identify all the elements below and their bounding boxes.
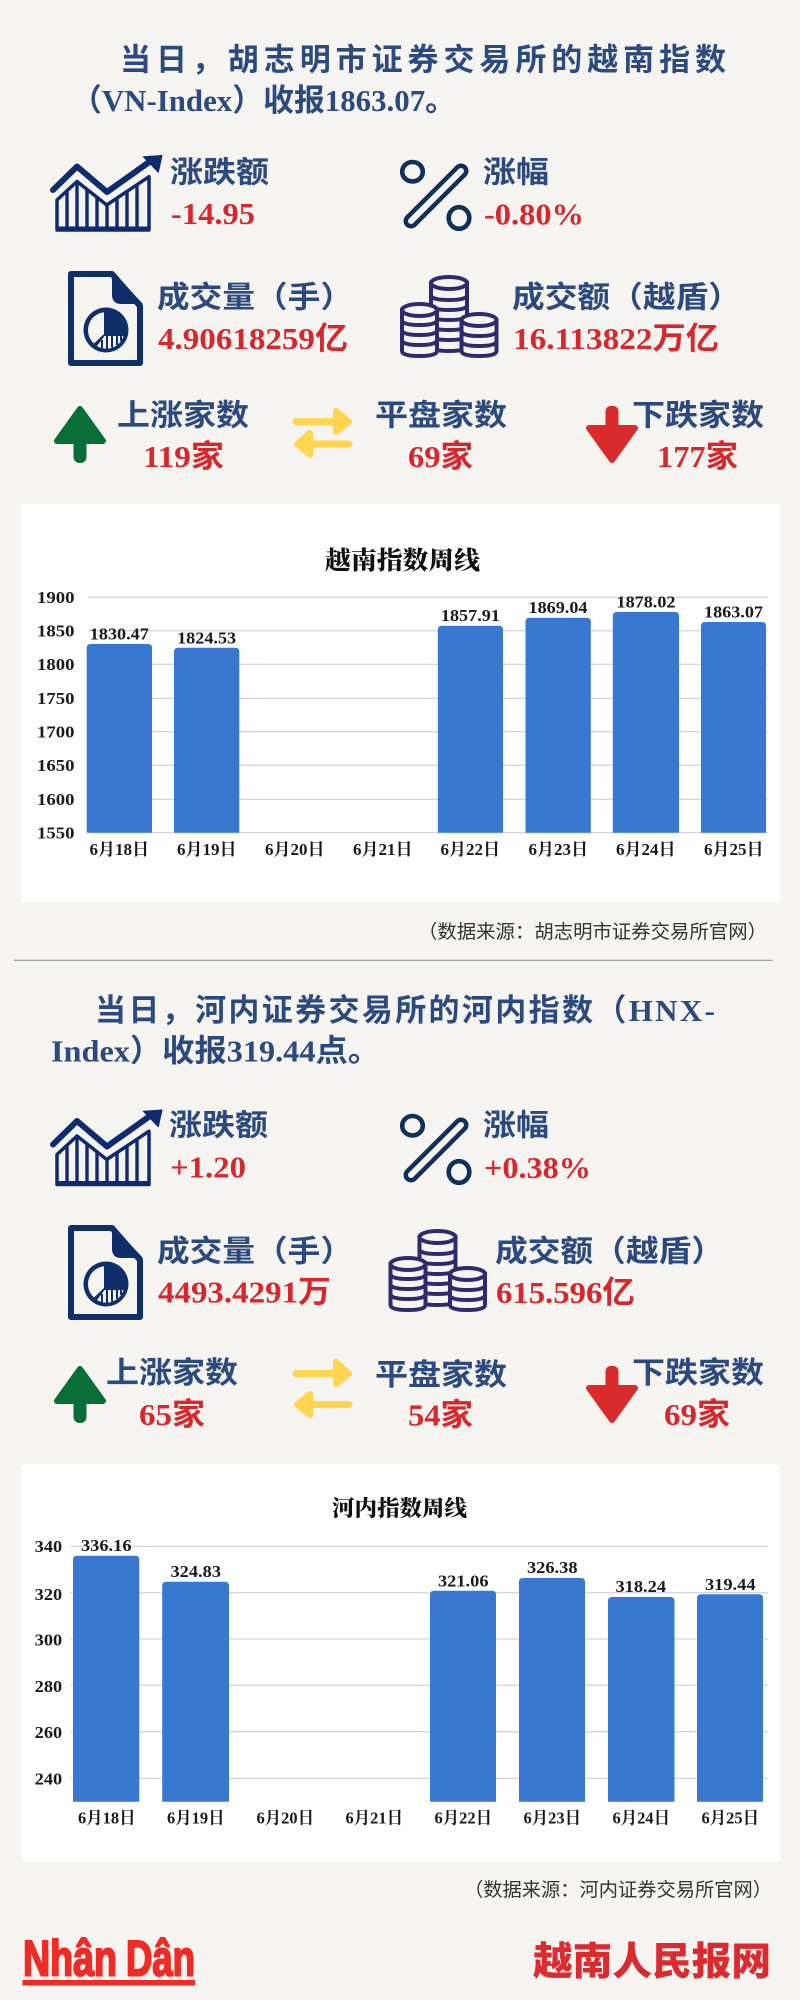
x axis labels: 6月25日 <box>702 1808 759 1828</box>
icon: yellow exchange arrows <box>296 411 349 455</box>
stat: decliners: 177家 <box>657 439 738 474</box>
x axis labels: 6月23日 <box>528 840 588 859</box>
icon: green up arrow <box>57 409 103 463</box>
y axis labels: 1850 <box>37 622 74 640</box>
y axis labels: 280 <box>35 1677 62 1696</box>
stat: change amount: 涨跌额 <box>170 156 269 190</box>
bar value labels: 1857.91 <box>441 606 500 625</box>
stat: trading value <box>495 1236 724 1310</box>
stat: decliners: 69家 <box>664 1397 730 1432</box>
x axis labels: 6月23日 <box>524 1808 581 1828</box>
title: HNX-Index summary <box>51 993 715 1068</box>
x axis labels: 6月24日 <box>616 840 676 859</box>
y axis labels: 260 <box>35 1723 62 1742</box>
brand name: 越南人民报网 <box>533 1941 771 1984</box>
logo: Nhan Dan: Dân <box>126 1930 195 1986</box>
stat: trading volume: 4493.4291万 <box>158 1274 331 1310</box>
bar value labels: 1878.02 <box>616 592 676 612</box>
x axis labels: 6月24日 <box>612 1808 670 1828</box>
stat: unchanged: 69家 <box>408 439 473 474</box>
icon: rising chart <box>53 1110 162 1186</box>
icon: document with pie chart <box>71 271 143 363</box>
y axis labels <box>37 588 74 842</box>
bar value labels: 324.83 <box>170 1562 221 1581</box>
x axis labels: 6月25日 <box>704 840 764 859</box>
x axis labels: 6月21日 <box>346 1808 403 1828</box>
x axis labels: 6月20日 <box>256 1808 314 1828</box>
title: VN-Index summary: （VN-Index）收报1863.07。 <box>71 83 456 118</box>
icon: percent <box>402 1116 469 1183</box>
title: HNX-Index summary: 当日，河内证券交易所的河内指数（HNX- <box>95 993 715 1028</box>
stat: unchanged: 平盘家数 <box>375 1359 507 1392</box>
stat: change percent: -0.80% <box>484 196 584 232</box>
icon: coins <box>390 1231 485 1310</box>
y axis labels: 1900 <box>37 588 74 607</box>
stat: change percent <box>483 1110 591 1185</box>
y axis labels: 340 <box>35 1537 62 1556</box>
bar value labels: 1863.07 <box>704 602 764 622</box>
x axis labels: 6月22日 <box>434 1808 492 1828</box>
stat: trading value: 16.113822万亿 <box>513 321 719 356</box>
y axis labels: 1800 <box>37 655 74 674</box>
stat: decliners: 下跌家数 <box>632 400 764 432</box>
stat: unchanged <box>375 1359 507 1432</box>
source note: HOSE: （数据来源：胡志明市证券交易所官网） <box>418 921 767 943</box>
panel: HNX-Index weekly bar chart <box>21 1464 780 1862</box>
icon: red down arrow <box>589 406 635 460</box>
section: HNX-Index <box>21 993 780 1901</box>
icon: red down arrow <box>589 1366 635 1420</box>
chart title: 河内指数周线 <box>332 1496 467 1521</box>
y axis labels: 1550 <box>37 824 74 842</box>
icon: percent <box>402 162 469 229</box>
stat: unchanged: 54家 <box>408 1398 473 1432</box>
icon: rising chart <box>53 156 162 231</box>
bar value labels <box>81 1536 756 1596</box>
x axis labels: 6月21日 <box>353 840 412 859</box>
x axis labels: 6月18日 <box>90 840 149 859</box>
logo: Nhan Dan: Nhân <box>23 1930 117 1986</box>
stat: advancers: 65家 <box>139 1397 205 1432</box>
stat: decliners <box>632 400 764 474</box>
stat: decliners: 下跌家数 <box>632 1357 764 1390</box>
y axis labels: 1700 <box>37 722 74 742</box>
stat: unchanged <box>375 400 507 474</box>
icon: yellow exchange arrows <box>296 1362 349 1415</box>
stat: change percent: 涨幅 <box>483 1110 549 1142</box>
stat: unchanged: 平盘家数 <box>375 400 507 432</box>
x axis labels: 6月18日 <box>78 1808 136 1828</box>
bar value labels: 319.44 <box>705 1575 756 1594</box>
y axis labels: 1650 <box>37 756 74 775</box>
stat: trading volume <box>157 282 353 356</box>
stat: advancers <box>106 1357 238 1432</box>
bar value labels: 326.38 <box>527 1558 578 1577</box>
stat: change percent <box>483 156 584 232</box>
stat: advancers: 上涨家数 <box>117 400 249 432</box>
stat: trading value: 成交额（越盾） <box>495 1236 724 1268</box>
icon: green up arrow <box>57 1369 103 1423</box>
chart title: 越南指数周线 <box>325 546 480 575</box>
stat: change amount <box>169 1110 268 1184</box>
stat: change amount: 涨跌额 <box>169 1110 268 1142</box>
x axis labels: 6月22日 <box>440 840 500 859</box>
title: VN-Index summary: 当日，胡志明市证券交易所的越南指数 <box>120 42 726 78</box>
source note: HNX: （数据来源：河内证券交易所官网） <box>464 1879 772 1901</box>
bar value labels: 1830.47 <box>90 624 149 644</box>
stat: trading value: 成交额（越盾） <box>512 282 741 314</box>
icon: coins <box>402 277 496 356</box>
x axis labels: 6月19日 <box>177 840 236 859</box>
x axis labels: 6月19日 <box>167 1808 224 1828</box>
icon: document with pie chart <box>71 1225 143 1317</box>
y axis labels <box>35 1537 62 1788</box>
title: HNX-Index summary: Index）收报319.44点。 <box>51 1034 380 1068</box>
bars <box>87 612 766 833</box>
section: VN-Index <box>21 42 780 943</box>
stat: advancers <box>117 400 249 474</box>
stat: trading value <box>512 282 741 356</box>
bar value labels <box>90 592 764 648</box>
stat: change percent: 涨幅 <box>483 156 549 190</box>
stat: advancers: 上涨家数 <box>106 1357 238 1390</box>
y axis labels: 1750 <box>37 689 74 708</box>
x axis labels: 6月20日 <box>265 840 324 859</box>
y axis labels: 320 <box>35 1585 62 1604</box>
stat: trading volume: 成交量（手） <box>157 1236 353 1268</box>
title: VN-Index summary <box>71 42 726 118</box>
stat: trading volume: 4.90618259亿 <box>158 321 348 356</box>
stat: trading value: 615.596亿 <box>496 1275 635 1310</box>
stat: decliners <box>632 1357 764 1432</box>
stat: change percent: +0.38% <box>484 1150 591 1185</box>
bar value labels: 336.16 <box>81 1536 132 1555</box>
bars <box>73 1556 763 1802</box>
stat: change amount: +1.20 <box>170 1150 246 1184</box>
y axis labels: 240 <box>35 1770 62 1788</box>
bar value labels: 1869.04 <box>528 598 588 617</box>
bar value labels: 318.24 <box>616 1577 667 1596</box>
y axis labels: 300 <box>35 1630 62 1650</box>
stat: change amount <box>170 156 269 231</box>
stat: change amount: -14.95 <box>171 196 255 231</box>
stat: advancers: 119家 <box>143 439 224 474</box>
x axis labels <box>90 840 764 859</box>
panel: VN-Index weekly bar chart <box>21 504 780 902</box>
bar value labels: 1824.53 <box>177 628 236 648</box>
stat: trading volume <box>157 1236 353 1310</box>
y axis labels: 1600 <box>37 790 74 809</box>
bar value labels: 321.06 <box>438 1572 488 1590</box>
stat: trading volume: 成交量（手） <box>157 282 353 314</box>
x axis labels <box>78 1808 759 1828</box>
